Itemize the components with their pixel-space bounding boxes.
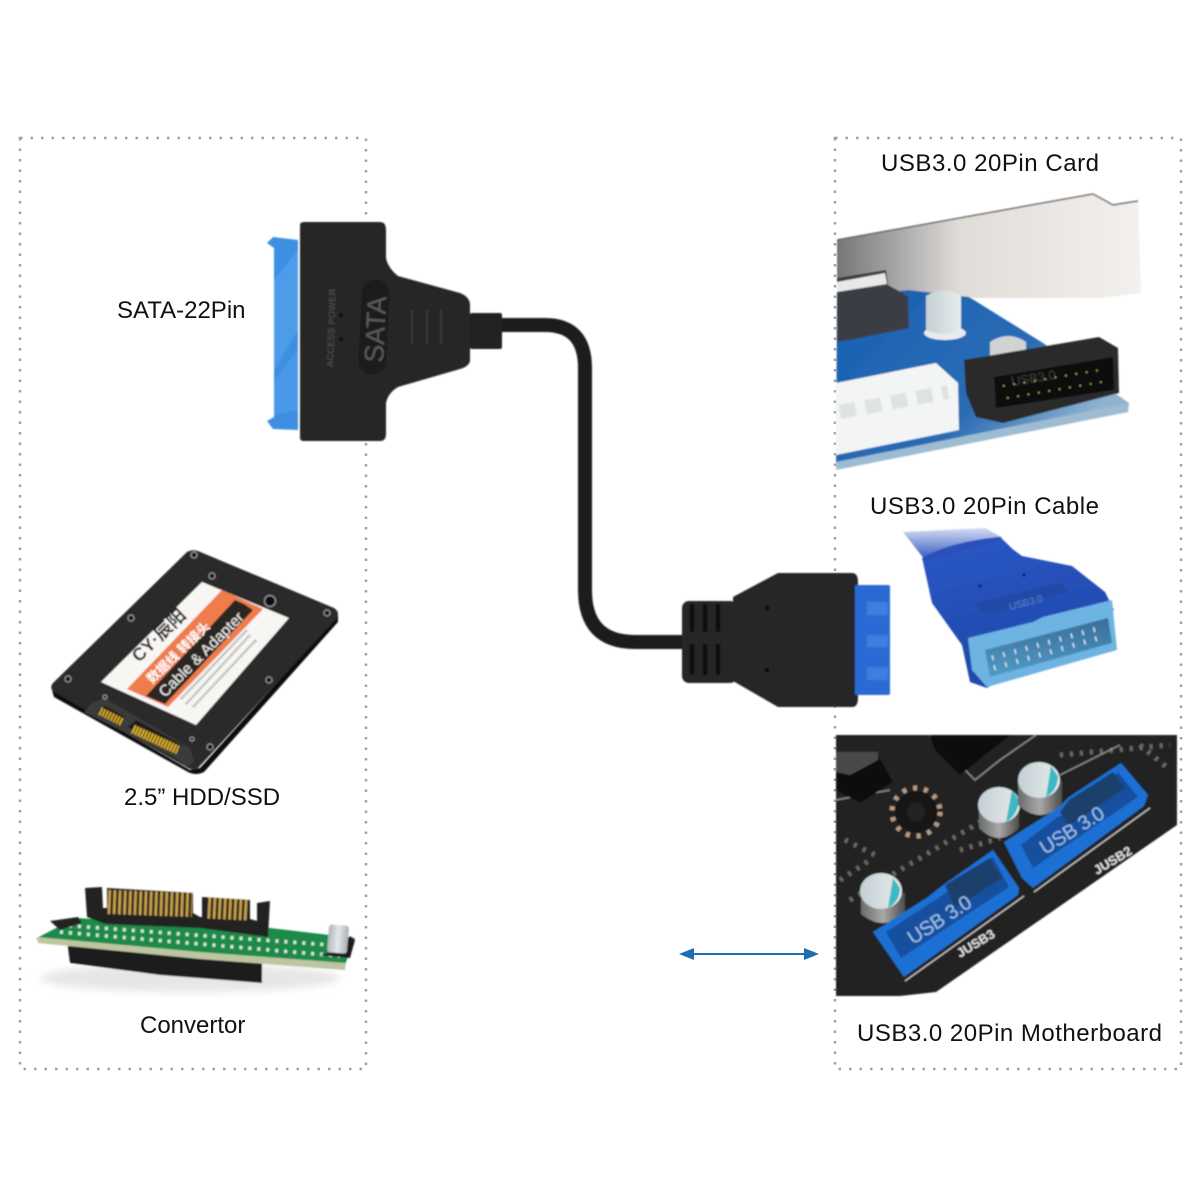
regulator chip: [50, 917, 82, 930]
board edge: [836, 403, 1129, 470]
label: USB3.0 20Pin Motherboard: USB3.0 20Pin Motherboard: [857, 1020, 1162, 1047]
JUSB2 header: [1004, 763, 1148, 888]
JUSB2 header: USB 3.0: [1036, 802, 1109, 859]
header outlines on PCB: [905, 808, 1150, 981]
SSD label text: Cable & Adapter: [156, 609, 248, 701]
short capacitor: [990, 336, 1026, 356]
PCB: [37, 918, 355, 966]
blue PCB: [836, 290, 1129, 467]
SSD top face: [51, 550, 338, 770]
PCB solder pads: [60, 925, 340, 956]
pins: [992, 627, 1106, 668]
motherboard image: [836, 735, 1177, 996]
capacitor: [1018, 762, 1062, 815]
shadow: [40, 964, 340, 992]
black chip under board: [67, 940, 262, 983]
white molex connector: [836, 363, 959, 455]
SSD screw holes: [65, 552, 330, 750]
socket top left: [836, 752, 893, 803]
JUSB3 header: [873, 850, 1019, 977]
small components: [840, 745, 1170, 900]
SSD logo: CY·辰阳: [128, 605, 190, 666]
metal bracket: [837, 194, 1141, 320]
label: SATA-22Pin: SATA-22Pin: [117, 297, 246, 324]
JUSB3 header: JUSB3: [954, 926, 997, 961]
dark silkscreen traces: [836, 735, 1120, 800]
strain relief: [922, 537, 1022, 605]
light blue shell: [968, 600, 1117, 687]
SATA connector black body: ACCESS POWER: [325, 288, 338, 367]
SSD white label: [101, 582, 289, 725]
bracket top edge: [837, 194, 1138, 240]
panel: left dotted frame: [20, 138, 366, 1069]
label: USB3.0 20Pin Card: USB3.0 20Pin Card: [881, 150, 1099, 177]
raised label: [975, 583, 1068, 615]
SSD enclosure image: [51, 550, 338, 774]
PCB base: [836, 735, 1177, 996]
plug body: [923, 540, 1114, 688]
label: USB3.0 20Pin Cable: USB3.0 20Pin Cable: [870, 493, 1099, 520]
black 20 pin header: [964, 337, 1119, 423]
SATA connector black body: SATA: [359, 295, 392, 363]
SATA connector blue tongue: [267, 237, 298, 430]
black 20 pin header: USB3.0: [1010, 367, 1057, 389]
PCI card image: [836, 194, 1141, 470]
USB 20-pin connector: [682, 573, 890, 707]
SSD orange band: [127, 590, 263, 707]
adapter cable assembly: [267, 222, 890, 707]
capacitor: [860, 873, 905, 923]
slot dark: [930, 735, 1010, 775]
label: Convertor: Convertor: [140, 1012, 245, 1039]
Convertor board image: [37, 887, 355, 992]
cable: [498, 325, 690, 642]
JUSB3 header: USB 3.0: [904, 892, 976, 949]
PCB beige edge: [37, 937, 346, 970]
SSD fine print: [181, 630, 256, 707]
solder ring: [892, 788, 940, 836]
SSD side: [52, 615, 338, 774]
blue USB header plug image: [903, 528, 1117, 688]
crystal: [320, 924, 355, 958]
tall capacitor: [924, 290, 966, 340]
ribbon wire: [903, 528, 1003, 560]
USB socket: [837, 270, 909, 342]
blue USB header plug image: USB3.0: [1008, 594, 1045, 613]
panel: right dotted frame: [835, 138, 1181, 1069]
label: HDD/SSD: 2.5” HDD/SSD: [124, 784, 280, 811]
capacitor: [978, 787, 1020, 838]
SSD SATA port: [84, 698, 194, 767]
gold pins: [108, 902, 192, 905]
SATA header: [85, 887, 270, 937]
SSD Chinese heading: 数据线 转接头: [144, 619, 213, 686]
JUSB2 header: JUSB2: [1091, 843, 1134, 878]
SSD dark band: [146, 600, 253, 704]
SATA connector black body: [300, 222, 502, 441]
cavity: [985, 618, 1112, 677]
double arrow: [679, 948, 819, 960]
